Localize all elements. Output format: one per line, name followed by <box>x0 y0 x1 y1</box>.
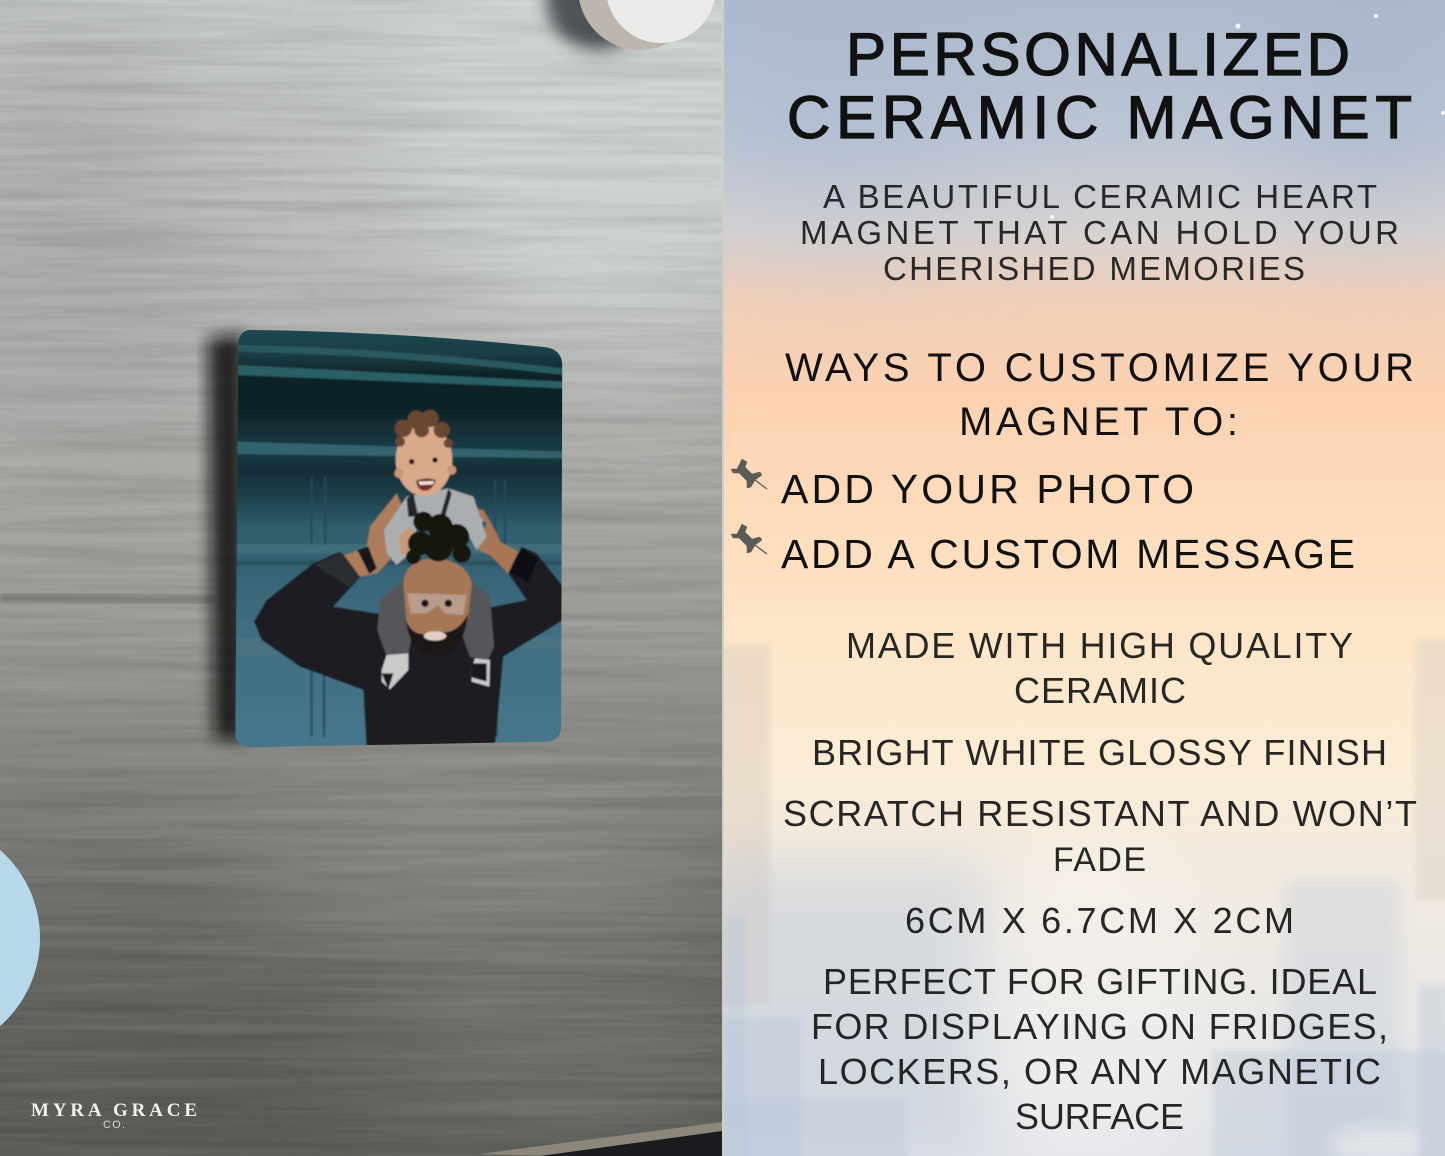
panel: brushed steel fridge photo <box>0 0 722 1156</box>
subtitle text block: A BEAUTIFUL CERAMIC HEART <box>823 178 1377 215</box>
feature: perfect for gifting: PERFECT FOR GIFTING. IDEAL <box>823 961 1377 1002</box>
title <box>787 21 1412 151</box>
feature: scratch resistant: FADE <box>1053 841 1146 879</box>
feature: high quality ceramic <box>846 625 1353 711</box>
door panel lines <box>312 477 505 737</box>
feature: scratch resistant <box>783 793 1417 879</box>
icon: pale blue round magnet at left <box>0 850 40 1026</box>
feature: high quality ceramic: MADE WITH HIGH QUALITY <box>846 625 1353 666</box>
list item: add your photo: ADD YOUR PHOTO <box>781 466 1194 512</box>
feature: high quality ceramic: CERAMIC <box>1014 670 1186 711</box>
man's face <box>402 558 472 636</box>
feature: perfect for gifting: SURFACE <box>1015 1096 1184 1137</box>
logo: Myra Grace Co.: CO. <box>103 1119 125 1131</box>
heading: ways to customize <box>785 346 1414 444</box>
cornice bands <box>237 345 563 375</box>
icon: push pin 2 <box>731 524 767 554</box>
icon: push pin 1 <box>731 459 767 489</box>
subtitle text block <box>800 178 1399 287</box>
man's body and arms <box>254 547 563 748</box>
logo: Myra Grace Co. <box>31 1104 196 1128</box>
heading: ways to customize: MAGNET TO: <box>959 400 1238 444</box>
icon: white round magnet at top <box>546 0 716 50</box>
list item: add a custom message: ADD A CUSTOM MESSAGE <box>781 531 1355 577</box>
child's body <box>384 488 487 565</box>
heading: ways to customize: WAYS TO CUSTOMIZE YOUR <box>785 346 1414 390</box>
feature: scratch resistant: SCRATCH RESISTANT AND WON’T <box>783 793 1417 834</box>
child's head <box>396 424 452 496</box>
subtitle text block: CHERISHED MEMORIES <box>883 250 1305 287</box>
photo magnet with father and child <box>233 327 567 750</box>
man's curly hair <box>406 512 471 564</box>
feature: dimensions: 6CM X 6.7CM X 2CM <box>905 900 1294 941</box>
logo: Myra Grace Co.: MYRA GRACE <box>31 1100 197 1121</box>
feature: perfect for gifting: LOCKERS, OR ANY MAGNETIC <box>818 1051 1381 1092</box>
feature: perfect for gifting: FOR DISPLAYING ON FRIDGES, <box>811 1006 1388 1047</box>
panel: watercolor sky and city background <box>700 0 1445 1156</box>
title: CERAMIC MAGNET <box>787 84 1412 151</box>
subtitle text block: MAGNET THAT CAN HOLD YOUR <box>800 214 1399 251</box>
feature: perfect for gifting <box>811 961 1388 1137</box>
man's forearms and hands <box>344 493 407 577</box>
child's legs <box>377 577 494 663</box>
magnet shadow <box>208 334 245 742</box>
title: PERSONALIZED <box>846 21 1350 88</box>
feature: glossy finish: BRIGHT WHITE GLOSSY FINISH <box>812 732 1387 773</box>
child's curly hair <box>395 410 453 448</box>
